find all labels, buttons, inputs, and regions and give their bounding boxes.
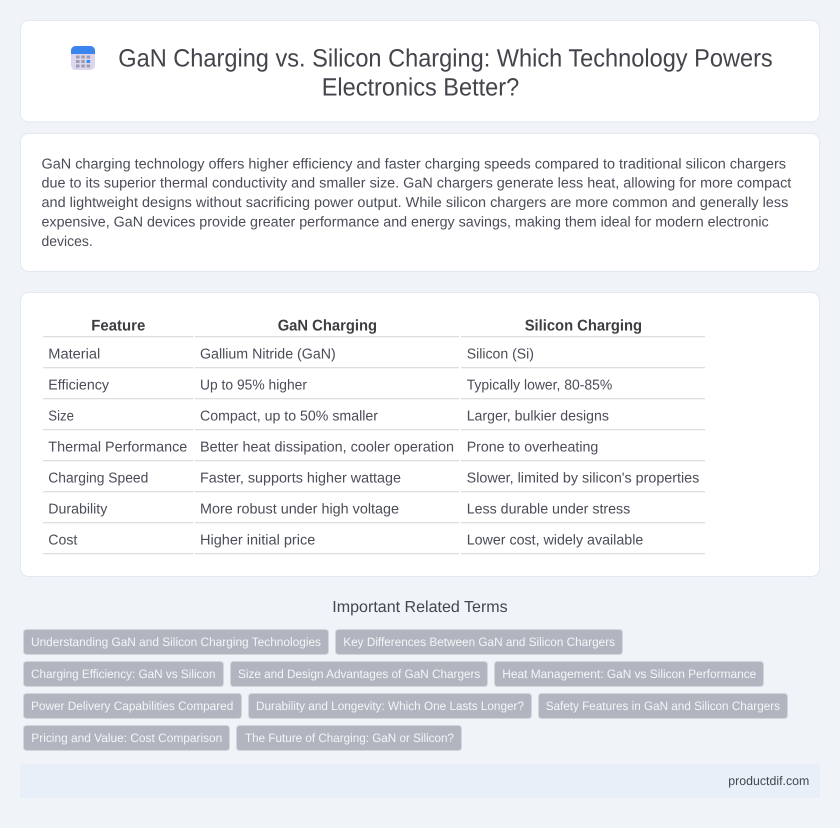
row: durability: Durability	[48, 501, 108, 517]
row: material: Silicon (Si)	[467, 346, 534, 362]
tag	[248, 694, 532, 718]
tag: Power Delivery Capabilities Compared	[31, 699, 233, 713]
tag	[24, 726, 230, 750]
row: material: Gallium Nitride (GaN)	[200, 346, 336, 362]
row: durability: More robust under high voltage	[200, 501, 399, 517]
heading: important related terms: Important Related Terms	[332, 599, 508, 616]
row: cost: Cost	[48, 532, 77, 548]
row: charging speed: Faster, supports higher wattage	[200, 470, 401, 486]
tag	[494, 662, 764, 686]
tag	[236, 726, 462, 750]
row: cost	[48, 532, 643, 548]
tag	[24, 662, 224, 686]
summary paragraph: and lightweight designs without sacrificing power output. While silicon chargers are more common and generally less	[42, 195, 788, 211]
row: efficiency: Typically lower, 80-85%	[467, 377, 613, 393]
table header row: GaN Charging	[278, 318, 377, 335]
tag: Durability and Longevity: Which One Lasts Longer?	[256, 699, 524, 713]
table header row: Feature	[91, 318, 146, 335]
header panel	[20, 20, 820, 122]
tag: Understanding GaN and Silicon Charging Technologies	[31, 635, 321, 649]
row: material	[48, 346, 534, 362]
title: GaN Charging vs. Silicon Charging: Which Technology Powers	[118, 45, 773, 73]
related term tags	[24, 630, 788, 750]
table header row: Silicon Charging	[525, 318, 642, 335]
row: thermal performance: Prone to overheating	[467, 439, 598, 455]
icon: calendar grid	[71, 46, 95, 70]
table header row	[91, 318, 642, 335]
tag	[538, 694, 788, 718]
tag: Pricing and Value: Cost Comparison	[31, 731, 222, 745]
row: cost: Higher initial price	[200, 532, 315, 548]
footer source text: productdif.com	[728, 774, 809, 788]
summary paragraph: devices.	[42, 234, 93, 250]
row: thermal performance: Thermal Performance	[48, 439, 187, 455]
row: thermal performance	[48, 439, 598, 455]
tag: Size and Design Advantages of GaN Chargers	[238, 667, 480, 681]
row: charging speed	[48, 470, 699, 486]
row: cost: Lower cost, widely available	[467, 532, 643, 548]
row: efficiency	[48, 377, 613, 393]
summary paragraph	[42, 156, 791, 250]
row: charging speed: Slower, limited by silicon's properties	[467, 470, 699, 486]
row: size: Larger, bulkier designs	[467, 408, 609, 424]
tag: Charging Efficiency: GaN vs Silicon	[31, 667, 216, 681]
row: material: Material	[48, 346, 100, 362]
row: size	[48, 408, 609, 424]
footer	[20, 764, 820, 798]
row: charging speed: Charging Speed	[48, 470, 148, 486]
tag	[24, 694, 242, 718]
row: thermal performance: Better heat dissipation, cooler operation	[200, 439, 454, 455]
row: size: Size	[48, 408, 74, 424]
summary paragraph: expensive, GaN devices provide greater performance and energy savings, making them ideal for modern electronic	[42, 214, 769, 230]
tag: Heat Management: GaN vs Silicon Performance	[502, 667, 757, 681]
row: durability	[48, 501, 630, 517]
tag: Key Differences Between GaN and Silicon Chargers	[343, 635, 615, 649]
panel: comparison table	[20, 292, 820, 576]
tag	[336, 630, 622, 654]
title	[118, 45, 773, 102]
tag: The Future of Charging: GaN or Silicon?	[245, 731, 454, 745]
row: durability: Less durable under stress	[467, 501, 630, 517]
panel: summary text	[20, 134, 820, 272]
summary paragraph: GaN charging technology offers higher efficiency and faster charging speeds compared to traditional silicon chargers	[42, 156, 786, 172]
tag	[24, 630, 328, 654]
tag: Safety Features in GaN and Silicon Chargers	[546, 699, 780, 713]
row: size: Compact, up to 50% smaller	[200, 408, 378, 424]
title: Electronics Better?	[322, 74, 519, 102]
tag	[230, 662, 488, 686]
row: efficiency: Efficiency	[48, 377, 110, 393]
row: efficiency: Up to 95% higher	[200, 377, 307, 393]
summary paragraph: due to its superior thermal conductivity and smaller size. GaN chargers generate less heat, allowing for more compact	[42, 176, 791, 192]
